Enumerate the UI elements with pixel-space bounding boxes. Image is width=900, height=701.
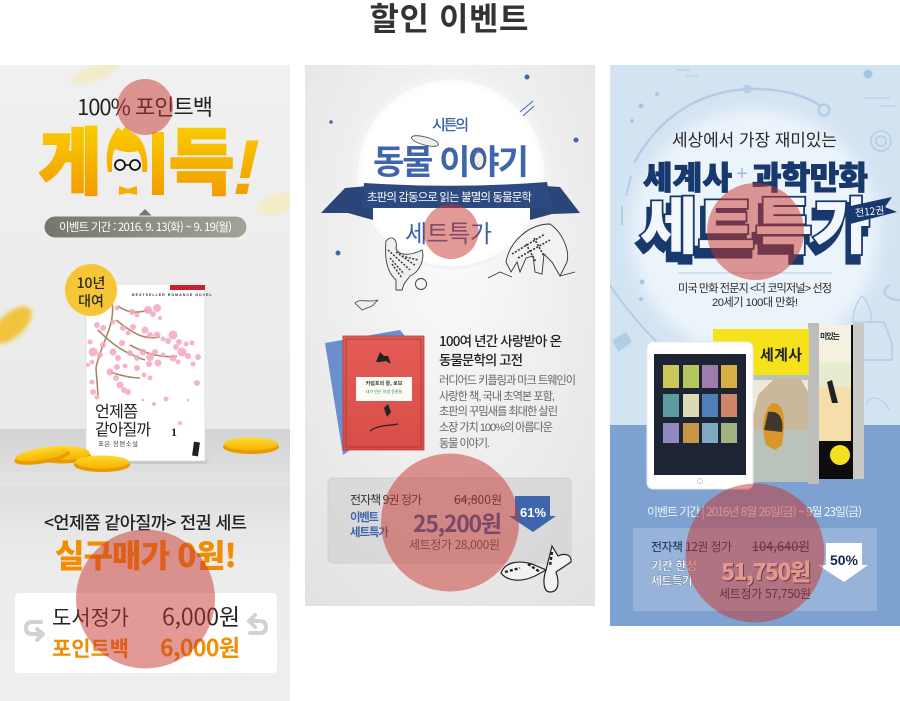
description body: 소장 가치 100%의 아름다운 bbox=[439, 421, 553, 434]
badge: 10년 대여: 10년 bbox=[77, 273, 105, 293]
price box: 세트정가 57,750원 bbox=[719, 585, 811, 602]
sketch: rabbits bbox=[501, 546, 571, 592]
description heading: 동물문학의 고전 bbox=[439, 349, 523, 369]
book: 세계사: 세계사 bbox=[760, 344, 802, 365]
panel: animal stories bbox=[305, 65, 595, 606]
discount arrow bbox=[509, 496, 556, 532]
description body bbox=[439, 374, 576, 450]
description heading bbox=[440, 334, 562, 366]
book: 언제쯤 같아질까: 같아질까 bbox=[95, 416, 151, 440]
heading line: + bbox=[736, 163, 748, 185]
highlight: panel 1 top bbox=[117, 79, 173, 135]
blossoms bbox=[86, 304, 201, 425]
ribbon: 전12권 bbox=[846, 197, 897, 224]
discount arrow bbox=[818, 543, 868, 582]
price box: 25,200원 bbox=[413, 505, 502, 539]
highlight: panel 3 bottom bbox=[686, 484, 824, 622]
icon: face with glasses bbox=[107, 126, 147, 195]
badge: 10년 대여: 대여 bbox=[78, 291, 104, 311]
heading line: 과학만화 bbox=[752, 153, 868, 199]
hat and bird on title bbox=[410, 134, 484, 168]
book stack: 내가 만난 야생 동물들 bbox=[366, 388, 403, 395]
heading line bbox=[642, 161, 868, 193]
book: third volume: 미있는 bbox=[820, 331, 841, 342]
highlight: panel 2 bottom bbox=[381, 454, 519, 592]
description body: 동물 이야기. bbox=[439, 437, 490, 450]
coins bbox=[13, 438, 279, 472]
price box: 기간 한정 bbox=[651, 557, 697, 574]
highlight: panel 3 top bbox=[707, 183, 804, 280]
sketch: chick bbox=[355, 300, 378, 310]
price box: 51,750원 bbox=[721, 553, 811, 587]
glow circle bbox=[631, 109, 879, 357]
headline price: 실구매가 0원! bbox=[55, 531, 237, 577]
arrows bbox=[26, 615, 266, 640]
price box: 104,640원 bbox=[752, 536, 810, 555]
sketch: rooster bbox=[386, 238, 426, 290]
book: 언제쯤 같아질까: 표은 장편소설 bbox=[98, 438, 138, 448]
panel: point-back event bbox=[0, 58, 300, 701]
book: 언제쯤 같아질까: BESTSELLER ROMANCE NOVEL bbox=[132, 293, 213, 297]
ribbon bbox=[321, 182, 580, 220]
logo: 게이득!: ! bbox=[232, 123, 260, 211]
date pill: 이벤트 기간 : 2016. 9. 13(화) ~ 9. 19(월) bbox=[59, 219, 232, 235]
price box: 51,750원 bbox=[722, 554, 812, 588]
blurred flying coins bbox=[0, 58, 300, 350]
book stack: 커럼포의 왕, 로보 bbox=[366, 380, 403, 387]
price box: 세트특가 bbox=[350, 524, 389, 540]
price box: 64,800원 bbox=[454, 491, 502, 508]
price box: 세트특가 bbox=[651, 572, 693, 589]
highlight circles bbox=[76, 79, 824, 668]
book: 언제쯤 같아질까: 1 bbox=[171, 425, 177, 439]
tablet bbox=[647, 342, 753, 489]
description body: 러디어드 키플링과 마크 트웨인이 bbox=[439, 374, 576, 387]
price card: 도서정가 bbox=[52, 602, 129, 632]
big outlined title: 세트특가 bbox=[637, 185, 867, 274]
ribbon: 전12권: 전12권 bbox=[854, 202, 885, 220]
subtitle: 100% 포인트백 bbox=[77, 90, 213, 122]
subtitle: 세상에서 가장 재미있는 bbox=[672, 126, 837, 151]
series label: 시튼의 bbox=[432, 114, 469, 135]
blossom branches bbox=[96, 303, 177, 395]
price card: 포인트백 bbox=[52, 633, 129, 663]
date pill bbox=[44, 209, 247, 238]
highlight: panel 2 top bbox=[424, 204, 478, 259]
price card: 6,000원 bbox=[162, 598, 240, 632]
price box bbox=[328, 478, 571, 563]
price card: 6,000원 bbox=[160, 629, 240, 663]
book title: 언제쯤 bbox=[95, 398, 138, 422]
caption: 20세기 100대 만화! bbox=[712, 296, 798, 309]
series title: 동물 이야기 bbox=[373, 135, 529, 184]
price card bbox=[15, 593, 277, 673]
book: 언제쯤 같아질까 bbox=[86, 284, 213, 463]
sketch: sheep bbox=[488, 224, 575, 278]
heading line: 세계사 bbox=[643, 153, 732, 199]
description body: 초판의 꾸밈새를 최대한 살린 bbox=[439, 405, 558, 418]
big outlined title: 세트특가 bbox=[640, 177, 870, 266]
highlight: panel 1 bottom bbox=[76, 530, 215, 668]
book: third volume bbox=[818, 323, 864, 479]
set heading: <언제쯤 같아질까> 전권 세트 bbox=[44, 510, 247, 535]
badge: 10년 대여 bbox=[65, 264, 117, 316]
price box bbox=[633, 528, 877, 611]
glow circle bbox=[357, 79, 545, 267]
price box: 전자책 9권 정가 bbox=[350, 491, 422, 508]
description heading: 100여 년간 사랑받아 온 bbox=[439, 330, 562, 350]
orbit decorations bbox=[610, 70, 900, 372]
logo: 게이득!: 득 bbox=[169, 104, 234, 209]
description body: 사랑한 책, 국내 초역본 포함, bbox=[439, 389, 555, 403]
panel: world history and science comics bbox=[610, 65, 900, 626]
book: 세계사 bbox=[713, 323, 819, 484]
price box: 세트정가 28,000원 bbox=[409, 536, 500, 553]
logo: 게이득! bbox=[38, 126, 258, 196]
ribbon: 초판의 감동으로 읽는 불멸의 동물문학 bbox=[367, 189, 532, 205]
price box: 이벤트 bbox=[350, 509, 379, 525]
doodles bbox=[329, 74, 578, 256]
discount arrow: 61% bbox=[520, 505, 546, 520]
discount arrow: 50% bbox=[830, 552, 859, 568]
caption bbox=[678, 282, 832, 309]
price box: 전자책 12권 정가 bbox=[651, 538, 732, 555]
caption: 미국 만화 전문지 <더 코믹저널> 선정 bbox=[678, 282, 832, 295]
logo: 게이득!: 게 bbox=[39, 104, 101, 209]
sale label: 세트특가 bbox=[405, 214, 492, 249]
event period: 이벤트 기간 | 2016년 8월 26일(금) ~ 9월 23일(금) bbox=[647, 503, 862, 520]
title: 할인 이벤트 bbox=[370, 1, 528, 37]
book stack bbox=[325, 330, 424, 455]
